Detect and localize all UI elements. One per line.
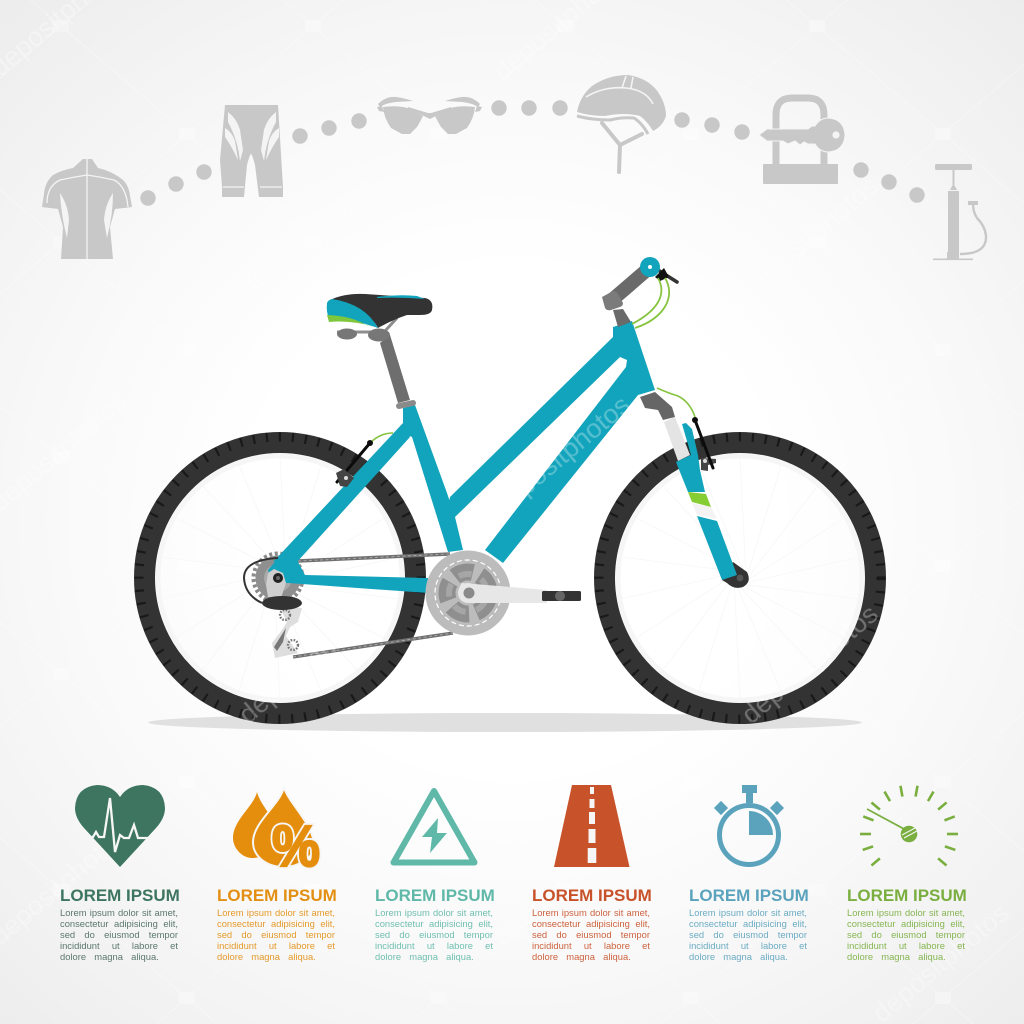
panel: stopwatch (689, 785, 809, 962)
text: depositphotos (233, 171, 381, 302)
text block: Lorem ipsum dolor sit amet, (847, 907, 965, 918)
text block: dolore magna aliqua. (847, 951, 946, 962)
bicycle (139, 257, 881, 719)
text block: sed do eiusmod tempor (217, 929, 335, 940)
panel: hydration (217, 790, 337, 962)
text block: Lorem ipsum dolor sit amet, (689, 907, 807, 918)
text block: dolore magna aliqua. (689, 951, 788, 962)
heading: LOREM IPSUM (217, 886, 337, 905)
text block: dolore magna aliqua. (60, 951, 159, 962)
panel: speedometer (847, 786, 967, 962)
text: depositphotos (233, 599, 381, 730)
text block: consectetur adipisicing elit, (847, 918, 965, 929)
text block (532, 907, 650, 962)
icon: water drops with percent: % (272, 814, 320, 879)
text block: incididunt ut labore et (60, 940, 178, 951)
text block: sed do eiusmod tempor (375, 929, 493, 940)
heading: LOREM IPSUM (847, 886, 967, 905)
icon: heart with pulse (75, 785, 165, 867)
chain (293, 554, 453, 657)
text block: Lorem ipsum dolor sit amet, (60, 907, 178, 918)
dots: glasses to helmet (491, 100, 568, 116)
front wheel (599, 437, 881, 719)
text block: consectetur adipisicing elit, (217, 918, 335, 929)
heading: LOREM IPSUM (60, 886, 180, 905)
icon row: cycling gear (42, 75, 986, 260)
text block: sed do eiusmod tempor (60, 929, 178, 940)
dots: helmet to lock (674, 112, 750, 140)
icon: water drops with percent: % (272, 814, 320, 879)
text: depositphotos (736, 171, 884, 302)
text block: incididunt ut labore et (375, 940, 493, 951)
text block: incididunt ut labore et (847, 940, 965, 951)
rear cassette (254, 554, 302, 602)
text block (375, 907, 493, 962)
icon: cycling jersey (42, 159, 132, 260)
heading: LOREM IPSUM (375, 886, 495, 905)
heading: LOREM IPSUM (532, 886, 652, 905)
panel: warning (375, 788, 495, 962)
rear wheel (139, 437, 421, 719)
text block (217, 907, 335, 962)
ground shadow (148, 713, 862, 732)
text block: Lorem ipsum dolor sit amet, (375, 907, 493, 918)
icon: lock and key (759, 98, 845, 184)
icon: helmet (577, 75, 666, 172)
text block: dolore magna aliqua. (532, 951, 631, 962)
text block: consectetur adipisicing elit, (375, 918, 493, 929)
text block: consectetur adipisicing elit, (60, 918, 178, 929)
icon: bicycle pump (933, 164, 986, 260)
frame (268, 321, 655, 593)
chainring and crank (426, 550, 547, 636)
text block: dolore magna aliqua. (217, 951, 316, 962)
dots: jersey to shorts (140, 164, 212, 206)
dots: shorts to glasses (292, 113, 367, 144)
text block: consectetur adipisicing elit, (532, 918, 650, 929)
icon: road (554, 785, 630, 867)
panel: heart rate (60, 785, 952, 962)
text block: Lorem ipsum dolor sit amet, (217, 907, 335, 918)
text block: Lorem ipsum dolor sit amet, (532, 907, 650, 918)
pedal (542, 591, 581, 601)
dots: lock to pump (853, 162, 925, 203)
front fork (640, 392, 749, 588)
text block: incididunt ut labore et (217, 940, 335, 951)
icon: water drops with percent (233, 790, 320, 879)
text block: dolore magna aliqua. (375, 951, 474, 962)
text: depositphotos (488, 821, 636, 952)
text block (847, 907, 965, 962)
seat post (380, 335, 413, 406)
icon: speedometer (860, 786, 958, 866)
icon: warning triangle with bolt (390, 788, 478, 866)
rear brake (336, 433, 393, 487)
icon: stopwatch (714, 785, 784, 867)
panel: road (532, 785, 652, 962)
text block: incididunt ut labore et (689, 940, 807, 951)
saddle (327, 294, 432, 342)
text: depositphotos (736, 599, 884, 730)
text block (689, 907, 807, 962)
text block: incididunt ut labore et (532, 940, 650, 951)
rear derailleur (244, 558, 302, 658)
text block: sed do eiusmod tempor (847, 929, 965, 940)
icon: cycling shorts (220, 105, 283, 197)
icon: sunglasses (377, 97, 482, 134)
text block: sed do eiusmod tempor (532, 929, 650, 940)
heading: LOREM IPSUM (689, 886, 809, 905)
handlebar and stem (602, 257, 677, 328)
text block: consectetur adipisicing elit, (689, 918, 807, 929)
front brake and cable (657, 388, 716, 471)
text block: sed do eiusmod tempor (689, 929, 807, 940)
text: depositphotos (488, 390, 636, 521)
text block (60, 907, 178, 962)
